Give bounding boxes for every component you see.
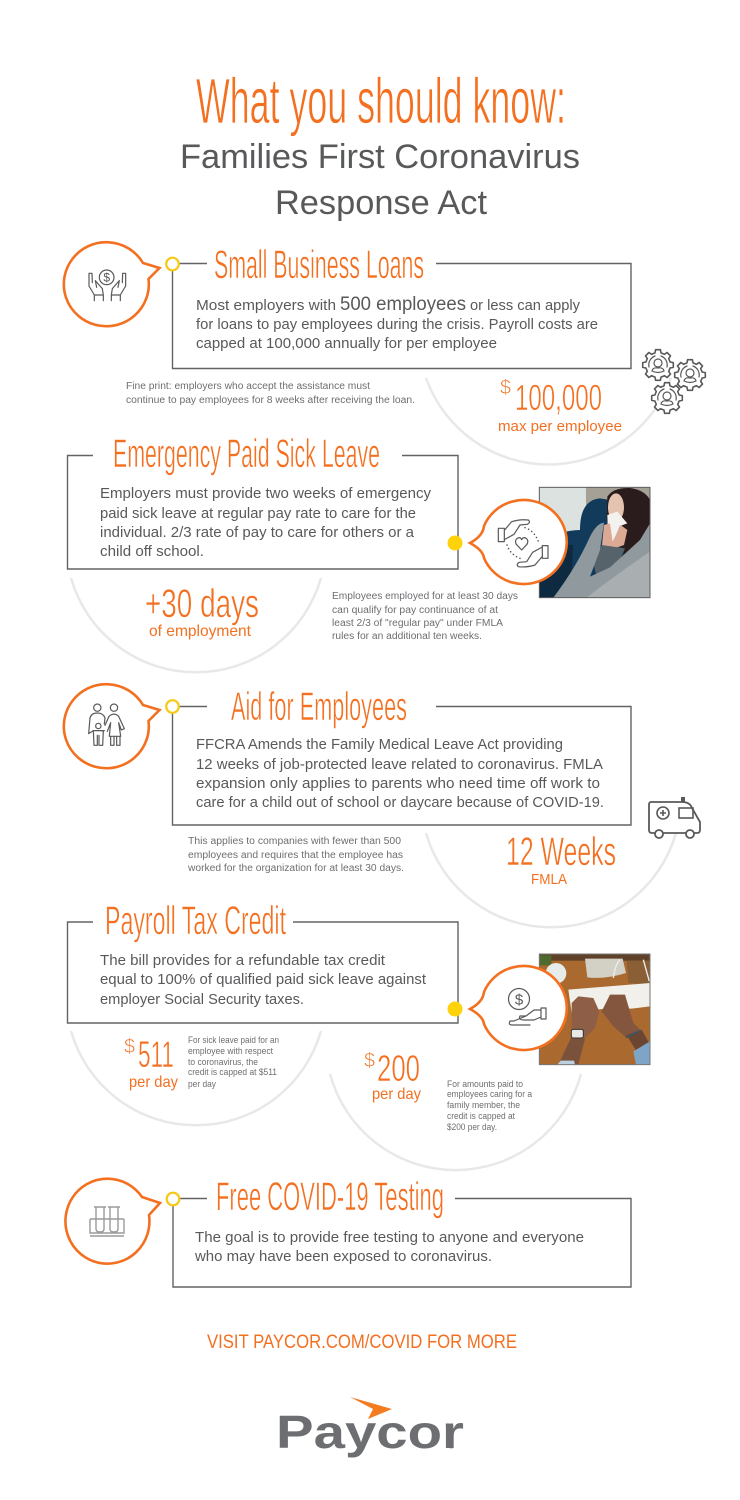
body text: The goal is to provide free testing to anyone and everyone	[195, 1229, 584, 1246]
subtitle: Response Act	[275, 184, 488, 222]
stat: $511 per day: $	[124, 1036, 135, 1058]
explanatory text: $200: family member, the	[447, 1100, 520, 1110]
body text: for loans to pay employees during the crisis. Payroll costs are	[196, 316, 598, 333]
connector ring	[167, 1193, 179, 1205]
stat: $511 per day: per day	[129, 1074, 178, 1091]
logo: Paycor	[276, 1397, 464, 1458]
box outline	[172, 706, 631, 825]
body text: child off school.	[100, 543, 204, 560]
body text: 500 employees	[340, 294, 466, 315]
fine print: Fine print: employers who accept the assistance must	[126, 381, 370, 392]
stat arc	[71, 578, 321, 672]
stat: $511 per day: 511	[138, 1034, 174, 1075]
box outline	[68, 456, 458, 569]
stat: +30 days	[145, 582, 259, 640]
body text: Employers must provide two weeks of emergency	[100, 485, 431, 502]
stat: 12 weeks: 12 Weeks	[506, 830, 616, 874]
photo: hands typing on keyboard at wooden desk	[539, 954, 650, 1065]
explanatory text: $511: credit is capped at $511	[188, 1067, 277, 1077]
photo: woman with tissue under blanket	[539, 487, 650, 598]
heading: Emergency Paid Sick Leave	[113, 432, 380, 476]
body text	[196, 294, 598, 352]
heading: Aid for Employees	[231, 685, 407, 729]
body text: The bill provides for a refundable tax credit	[100, 952, 386, 969]
panel: free COVID-19 testing	[65, 1175, 631, 1287]
stat arc 1	[71, 1031, 321, 1125]
explanatory text: Employees employed for at least 30 days	[332, 591, 518, 602]
body text: expansion only applies to parents who need time off work to	[196, 775, 600, 792]
body text	[100, 485, 431, 560]
heading: Small Business Loans	[214, 243, 424, 287]
explanatory text: $511: For sick leave paid for an	[188, 1035, 279, 1045]
fine print: employees and requires that the employee has	[188, 850, 403, 861]
registered mark: ®	[449, 1444, 454, 1451]
body text: who may have been exposed to coronavirus.	[194, 1248, 492, 1265]
explanatory text: can qualify for pay continuance of at	[332, 605, 498, 616]
speech bubble icon: hand with dollar coin: $	[515, 992, 524, 1008]
stat: $200 per day: 200	[377, 1048, 420, 1089]
body text: capped at 100,000 annually for per employee	[196, 335, 497, 352]
speech bubble icon: test tubes	[65, 1179, 160, 1264]
body text: care for a child out of school or daycare because of COVID-19.	[196, 794, 604, 811]
heading: Payroll Tax Credit	[105, 899, 286, 943]
body text	[194, 1229, 584, 1265]
explanatory text: $511: employee with respect	[188, 1046, 273, 1056]
stat: 12 weeks	[506, 830, 616, 888]
stat: $100,000: max per employee	[498, 418, 622, 435]
connector ring	[166, 700, 179, 713]
explanatory text	[332, 591, 518, 642]
fine print	[187, 836, 404, 874]
stat arc 2	[330, 1074, 581, 1170]
explanatory text: $200	[447, 1079, 532, 1132]
speech bubble icon: hands and dollar coin: $	[103, 271, 110, 285]
explanatory text: $200: employees caring for a	[447, 1089, 532, 1099]
connector dot	[448, 1002, 462, 1016]
fine print: This applies to companies with fewer than 500	[188, 836, 401, 847]
panel: small business loans	[64, 242, 705, 464]
stat: $200 per day	[364, 1048, 421, 1103]
body text: 12 weeks of job-protected leave related to coronavirus. FMLA	[196, 756, 603, 773]
box outline	[173, 1198, 631, 1287]
body text: FFCRA Amends the Family Medical Leave Act providing	[196, 736, 563, 753]
stat: +30 days: +30 days	[145, 582, 259, 626]
explanatory text: least 2/3 of "regular pay" under FMLA	[332, 618, 503, 629]
panel: payroll tax credit	[68, 899, 650, 1170]
panel: aid for employees	[64, 684, 700, 927]
stat: +30 days: of employment	[149, 623, 252, 640]
explanatory text: $200: $200 per day.	[447, 1122, 497, 1132]
stat: $200 per day: per day	[372, 1086, 421, 1103]
stat arc	[426, 833, 676, 927]
explanatory text: $511: to coronavirus, the	[188, 1057, 258, 1067]
stat: $100,000: 100,000	[515, 377, 602, 418]
body text: or less can apply	[470, 297, 580, 314]
body text: equal to 100% of qualified paid sick leave against	[100, 971, 427, 988]
speech bubble icon: hands and dollar coin	[64, 242, 159, 326]
logo arrow	[350, 1397, 392, 1419]
fine print: continue to pay employees for 8 weeks after receiving the loan.	[126, 395, 415, 406]
logo wordmark: Paycor	[276, 1406, 464, 1458]
icon: gears with people	[643, 350, 705, 413]
explanatory text: rules for an additional ten weeks.	[332, 631, 482, 642]
box outline	[172, 264, 631, 368]
body text	[100, 952, 427, 1008]
stat: 12 weeks: FMLA	[531, 871, 567, 888]
explanatory text: $200: credit is capped at	[447, 1111, 515, 1121]
speech bubble icon: hand with dollar coin	[470, 966, 567, 1050]
subtitle	[180, 138, 580, 222]
explanatory text: $511	[188, 1035, 279, 1089]
connector ring	[166, 258, 179, 270]
box outline	[68, 922, 458, 1023]
body text: Most employers with	[196, 297, 336, 314]
body text: individual. 2/3 rate of pay to care for others or a	[100, 524, 415, 541]
explanatory text: $511: per day	[188, 1079, 216, 1089]
stat: $511 per day	[124, 1034, 178, 1091]
call to action: VISIT PAYCOR.COM/COVID FOR MORE	[207, 1332, 517, 1353]
fine print	[126, 381, 415, 406]
stat: $100,000	[498, 377, 622, 435]
stat: $200 per day: $	[364, 1050, 375, 1072]
heading: Free COVID-19 Testing	[216, 1175, 444, 1219]
panel: emergency paid sick leave	[68, 432, 650, 672]
body text: employer Social Security taxes.	[100, 991, 304, 1008]
fine print: worked for the organization for at least 30 days.	[187, 863, 404, 874]
body text: paid sick leave at regular pay rate to care for the	[100, 505, 416, 522]
subtitle: Families First Coronavirus	[180, 138, 580, 176]
explanatory text: $200: For amounts paid to	[447, 1079, 523, 1089]
speech bubble icon: family	[64, 684, 160, 768]
stat: $100,000: $	[500, 377, 511, 399]
stat arc	[426, 378, 671, 464]
connector dot	[448, 536, 462, 550]
speech bubble icon: caring hands and heart	[470, 500, 567, 584]
body text	[196, 736, 604, 811]
icon: ambulance	[649, 797, 700, 838]
